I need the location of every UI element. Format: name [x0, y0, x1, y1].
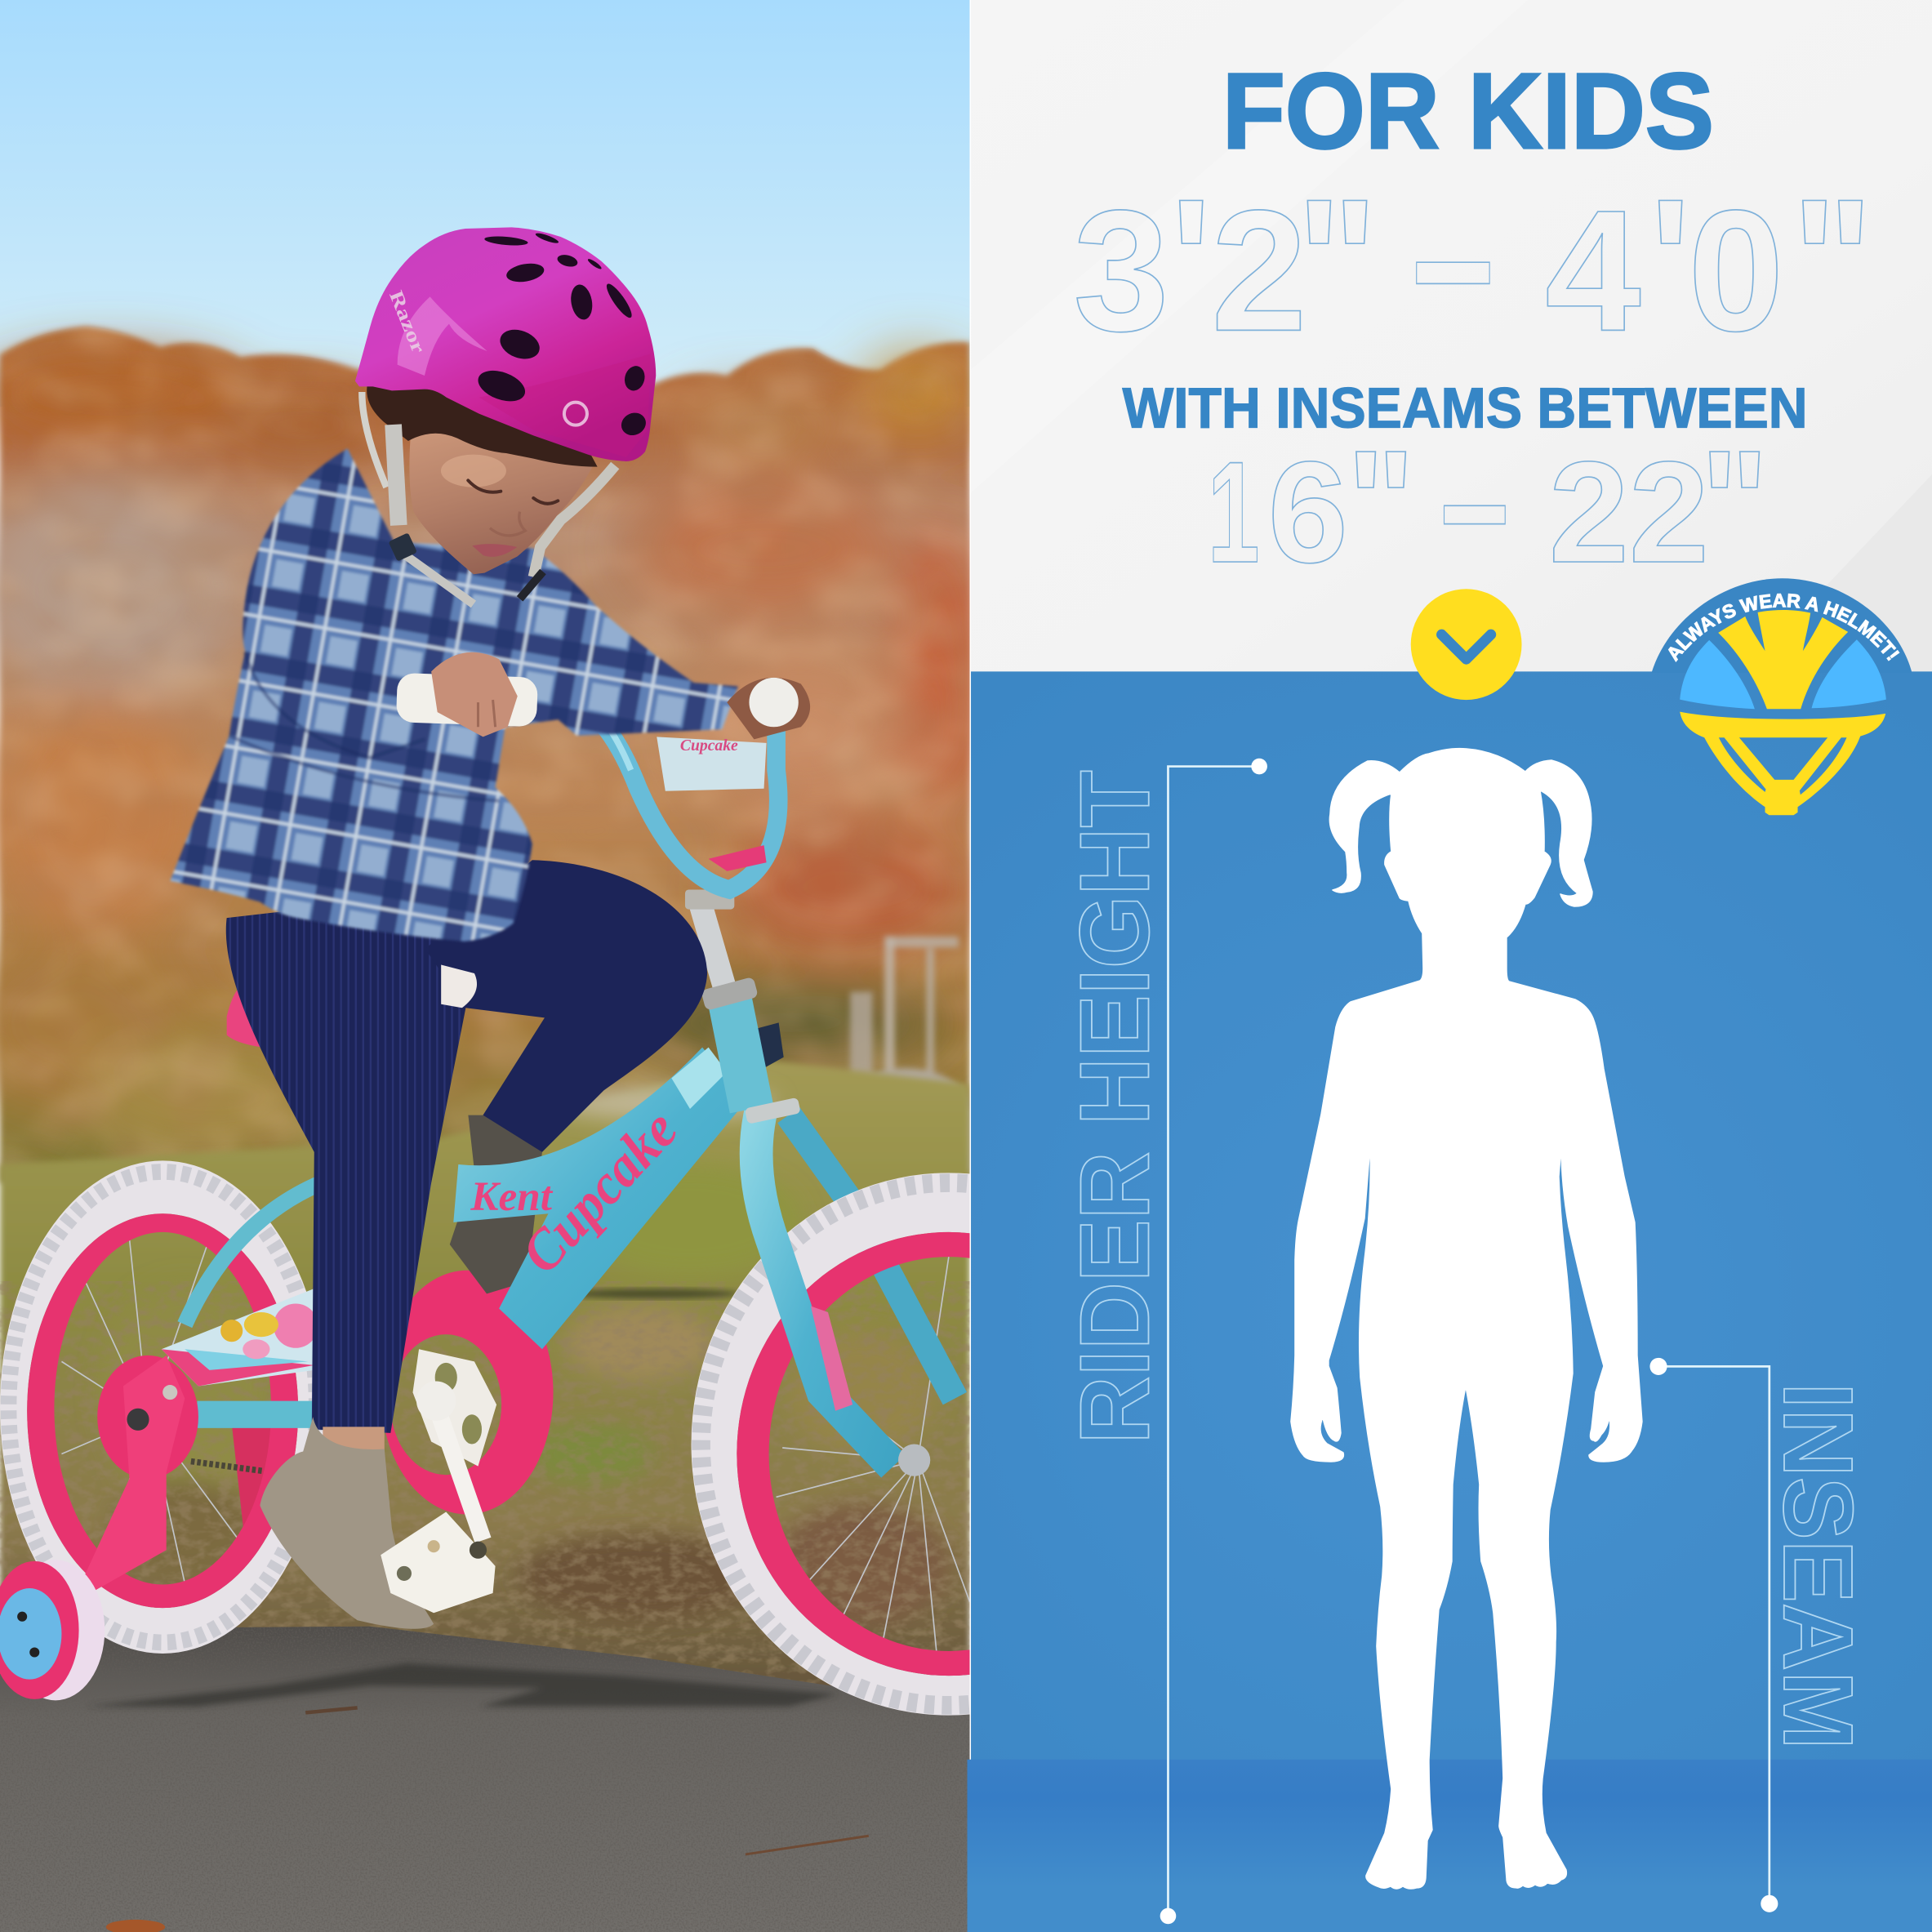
- outlined inseam range: 16" – 22": 2: [1549, 432, 1629, 593]
- rear wheel: [0, 1160, 325, 1654]
- panel: photo of girl riding a bike: [0, 0, 970, 1932]
- helmet shell: [355, 227, 656, 461]
- dark buckle: [520, 572, 543, 599]
- eyes: [468, 480, 558, 504]
- outlined inseam range: 16" – 22": [1208, 397, 1769, 603]
- far hand on grip: [727, 678, 810, 739]
- far shoe and shin: [450, 1115, 542, 1293]
- icon: yellow chevron button: [1411, 589, 1522, 700]
- helmet brand: Razor: [385, 287, 429, 357]
- rear bike frame stays: [162, 1177, 314, 1428]
- plaid shirt: [170, 448, 738, 942]
- outlined inseam range: 16" – 22": 6: [1268, 432, 1348, 593]
- raised leg, leggings: [425, 860, 707, 1152]
- outlined height range: 3'2" – 4'0": ": [1296, 163, 1378, 356]
- lips: [472, 544, 517, 557]
- helmet vents: [474, 231, 649, 439]
- distant fence and rocks: [846, 933, 970, 1171]
- bike frame main body: [453, 1022, 784, 1349]
- boot: [260, 1417, 434, 1629]
- outlined inseam range: 16" – 22": 1: [1208, 431, 1260, 593]
- outlined height range: 3'2" – 4'0": ': [1649, 163, 1691, 356]
- outlined inseam range: 16" – 22": ": [1700, 421, 1769, 581]
- label: RIDER HEIGHT: RIDER HEIGHT: [1059, 770, 1169, 1444]
- outlined height range: 3'2" – 4'0": 3: [1073, 174, 1169, 367]
- label: INSEAM: INSEAM: [1763, 1382, 1873, 1750]
- rear pink bracket and training wheel arm: [84, 1356, 198, 1592]
- rider height bracket line: [1160, 759, 1267, 1924]
- girl's head with pink helmet: [355, 227, 656, 604]
- handlebar pad: [657, 737, 767, 791]
- front fork: [727, 986, 930, 1476]
- helmet highlight: [398, 296, 487, 376]
- icon: always wear a helmet badge: [1652, 578, 1912, 815]
- stem and handlebar: [537, 691, 778, 1011]
- frame logo: Kent: Kent: [470, 1173, 554, 1220]
- autumn tree hillside: [0, 320, 985, 1183]
- sky: [0, 0, 970, 407]
- outlined height range: 3'2" – 4'0": 0: [1688, 174, 1784, 367]
- training wheel: [0, 1560, 105, 1700]
- right grip: [749, 678, 799, 727]
- helmet lower sheen: [479, 354, 651, 457]
- outlined inseam range: 16" – 22": ": [1347, 421, 1415, 581]
- cupcake decal: [220, 1303, 318, 1359]
- outlined height range: 3'2" – 4'0": 2: [1211, 174, 1307, 367]
- grass and fallen leaves: [0, 1060, 970, 1725]
- badge text: ALWAYS WEAR A HELMET!: [1667, 593, 1899, 662]
- outlined height range: 3'2" – 4'0": 4: [1545, 174, 1641, 367]
- left grip and hand: [396, 652, 538, 737]
- heading: FOR KIDS: FOR KIDS: [1222, 51, 1714, 171]
- badge on head tube: [741, 1022, 784, 1070]
- crank and pedal: [381, 1382, 496, 1613]
- subheading: WITH INSEAMS BETWEEN: WITH INSEAMS BETWEEN: [1123, 376, 1808, 440]
- seat: [227, 983, 296, 1050]
- front wheel: [691, 1107, 970, 1716]
- asphalt path: [0, 1627, 970, 1932]
- pad logo: Cupcake: [680, 737, 738, 755]
- helmet emblem: [564, 403, 587, 425]
- outlined height range: 3'2" – 4'0": ': [1170, 163, 1212, 356]
- panel: blue figure background: [968, 671, 1932, 1932]
- helmet straps: [362, 392, 615, 604]
- forehead light: [441, 455, 506, 487]
- outlined inseam range: 16" – 22": 2: [1629, 432, 1709, 593]
- child silhouette with pigtails: [1291, 749, 1642, 1889]
- outlined height range: 3'2" – 4'0": –: [1412, 136, 1494, 376]
- panel: light top background: [971, 0, 1932, 673]
- hair: [367, 376, 598, 467]
- outlined height range: 3'2" – 4'0": ": [1792, 163, 1873, 356]
- ankle: [323, 1427, 385, 1452]
- frame logo: Cupcake: Cupcake: [510, 1098, 690, 1285]
- strap buckle: [389, 532, 417, 562]
- white seat nose: [441, 964, 477, 1008]
- nose shadow: [490, 512, 525, 536]
- chain guard: [381, 1271, 554, 1514]
- outlined inseam range: 16" – 22": –: [1440, 397, 1509, 603]
- face: [409, 419, 594, 574]
- inseam bracket line: [1649, 1358, 1778, 1912]
- outlined height range: 3'2" – 4'0": [1073, 136, 1873, 376]
- rear leg, leggings: [226, 887, 493, 1433]
